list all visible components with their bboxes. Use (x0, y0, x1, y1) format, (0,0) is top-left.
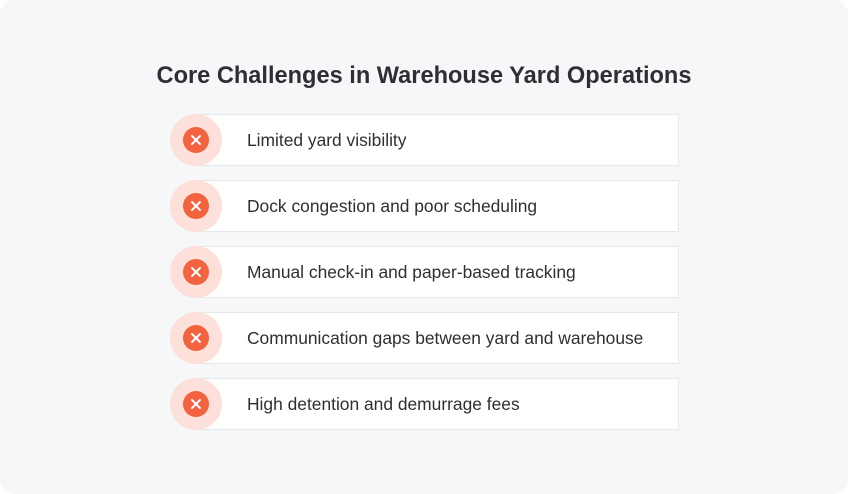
row: dock congestion: Dock congestion and poor scheduling (247, 196, 537, 216)
row: manual check-in: Manual check-in and paper-based tracking (247, 262, 576, 282)
row: communication gaps: Communication gaps between yard and warehouse (247, 328, 643, 348)
row: dock congestion (170, 180, 679, 232)
row: detention fees (170, 378, 679, 430)
row: limited yard visibility (170, 114, 679, 166)
row: manual check-in (170, 246, 679, 298)
row: limited yard visibility: Limited yard visibility (247, 130, 406, 150)
row: detention fees: High detention and demurrage fees (247, 394, 520, 414)
title: Core Challenges in Warehouse Yard Operations (157, 63, 691, 89)
row: communication gaps (170, 312, 679, 364)
